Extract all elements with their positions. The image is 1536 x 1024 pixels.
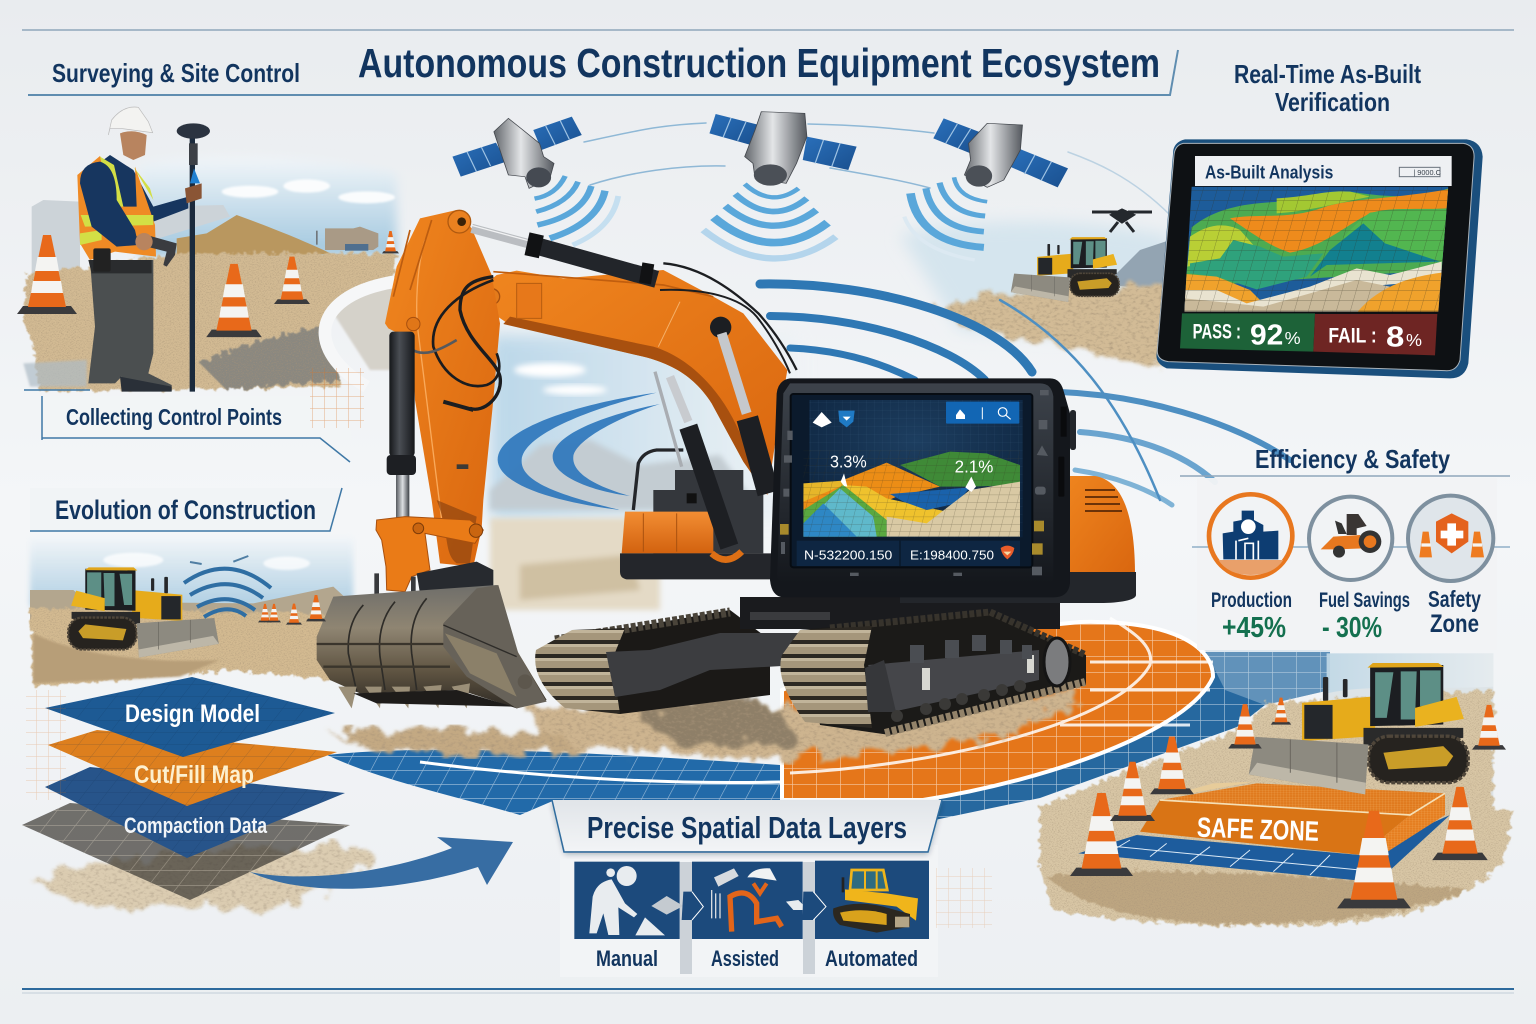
icon: assisted: [682, 862, 808, 939]
vertical hydraulic cylinder: [387, 332, 416, 518]
icon: birds: [190, 556, 248, 564]
terrain labels: 3.3%: [830, 451, 867, 471]
fail gauge: %: [1406, 330, 1422, 350]
layer: compaction data: [45, 767, 345, 858]
label: manual: Manual: [596, 946, 658, 971]
title: Autonomous Construction Equipment Ecosystem: [358, 40, 1160, 86]
pass gauge: %: [1285, 328, 1301, 348]
signal waves 2: [703, 184, 836, 258]
icon: safety zone: [1408, 496, 1493, 581]
stat: safety zone: Safety: [1428, 586, 1481, 612]
blue safe pad base: [1078, 815, 1450, 881]
toolbar button: [946, 402, 1019, 424]
layer: compaction data: Compaction Data: [124, 813, 268, 838]
icon: top right dozer: [1011, 237, 1119, 302]
support rods: [655, 372, 742, 560]
layer: cut/fill map: Cut/Fill Map: [134, 761, 254, 789]
panel: efficiency and safety: [1180, 444, 1510, 650]
bucket linkage: [376, 517, 493, 603]
cab and upper body: [620, 450, 777, 579]
coordinates readout: [797, 541, 1020, 566]
layer: design model: Design Model: [125, 700, 260, 728]
panel: precise spatial data layers: Precise Spatial Data Layers: [587, 810, 907, 845]
arrow: layers to data panel: [250, 837, 513, 889]
pass gauge: [1180, 313, 1315, 352]
layer: design model: [45, 677, 335, 757]
map header: As-Built Analysis: [1205, 161, 1333, 182]
layer: cut/fill map: [48, 730, 337, 806]
panel: collecting control points: Collecting Control Points: [66, 404, 282, 430]
stat: fuel savings: [1319, 589, 1410, 644]
icon: signal waves left: [184, 569, 271, 617]
map header: [1205, 161, 1442, 182]
in-cab monitor: [770, 378, 1076, 597]
coordinates readout: E:198400.750: [910, 547, 994, 562]
scene: top right site backdrop: [900, 222, 1172, 370]
rear track: [535, 610, 800, 714]
terrain heat map: [1183, 187, 1450, 317]
safe zone label: SAFE ZONE: [1196, 812, 1319, 847]
panel: evolution of construction: Evolution of Construction: [55, 495, 316, 525]
signal rings: [584, 123, 1290, 505]
stat: fuel savings: Fuel Savings: [1319, 589, 1410, 612]
icon: surveyor: [77, 107, 210, 392]
signal waves 3: [904, 177, 987, 260]
survey pole: [177, 123, 210, 392]
satellite 3: [933, 118, 1068, 187]
arm: [385, 210, 500, 567]
heading: efficiency: Efficiency & Safety: [1255, 444, 1450, 474]
safe zone cones: [1070, 698, 1506, 908]
layer: dark base: [22, 803, 350, 900]
stat: production: +45%: [1222, 612, 1286, 644]
stat: production: Production: [1211, 589, 1292, 612]
small cones left: [258, 595, 326, 625]
cones: surveying site: [17, 231, 399, 337]
icon: drone: [1092, 210, 1152, 232]
scene: surveying site backdrop: [23, 156, 397, 392]
stat: production: [1211, 589, 1292, 644]
screen icons: [813, 411, 855, 427]
satellite 2: [709, 112, 857, 186]
ground: dirt under excavator: [335, 690, 1085, 758]
icon: large dozer: [1249, 663, 1468, 794]
icon: production: [1209, 494, 1292, 578]
undercarriage: [740, 597, 1060, 629]
safe zone box: [1140, 782, 1445, 855]
signal waves 1: [535, 176, 618, 245]
satellites and signal waves: [452, 112, 1068, 260]
panel: precise spatial data layers: [552, 800, 942, 977]
label: assisted: Assisted: [711, 946, 779, 971]
heading: as-built verification: [1234, 59, 1421, 117]
coordinates readout: N-532200.150: [804, 547, 892, 562]
top hydraulic cylinder: [472, 225, 657, 283]
pass gauge: PASS :: [1193, 319, 1241, 343]
scene: evolution site backdrop: [30, 537, 353, 687]
scene: sky behind excavator: [490, 335, 800, 610]
ground floor: spatial grid: [327, 618, 1330, 822]
icon: dozer left: [68, 567, 219, 658]
stat: safety zone: [1428, 586, 1481, 638]
bezel buttons: [780, 390, 1049, 576]
bucket: [317, 585, 547, 708]
panel: evolution of construction: [30, 488, 342, 532]
terrain labels: 2.1%: [955, 456, 993, 476]
satellite 1: [452, 117, 582, 188]
pass gauge: 92: [1250, 319, 1283, 351]
map header: | 9000.C: [1413, 168, 1442, 177]
fail gauge: [1313, 314, 1437, 355]
excavator: [317, 210, 1136, 735]
fail gauge: 8: [1386, 322, 1404, 354]
heading: as-built verification: Verification: [1275, 87, 1390, 117]
icon: automated: [802, 861, 929, 939]
terrain labels: [830, 451, 993, 476]
stat: safety zone: Zone: [1430, 610, 1479, 638]
tablet: as-built analysis: [1156, 139, 1483, 378]
stat: fuel savings: - 30%: [1322, 612, 1382, 644]
heading: as-built verification: Real-Time As-Built: [1234, 59, 1421, 89]
boom: [477, 263, 797, 495]
icon: manual: [574, 862, 683, 939]
boom cylinder: [710, 317, 768, 493]
scene: safe zone ground: [1040, 653, 1513, 926]
icon: fuel savings: [1309, 497, 1392, 580]
heading: surveying: Surveying & Site Control: [52, 58, 300, 88]
on-screen terrain map: [803, 450, 1020, 537]
front track: [780, 612, 1086, 735]
fail gauge: FAIL :: [1328, 324, 1377, 348]
label: automated: Automated: [825, 946, 918, 971]
crescents behind the boom: [498, 393, 660, 510]
decorative grids: [26, 690, 992, 928]
body right: [900, 476, 1136, 603]
layer: dirt around stack: [30, 845, 372, 912]
title rule: [28, 50, 1178, 95]
panel: collecting control points: [24, 368, 364, 462]
